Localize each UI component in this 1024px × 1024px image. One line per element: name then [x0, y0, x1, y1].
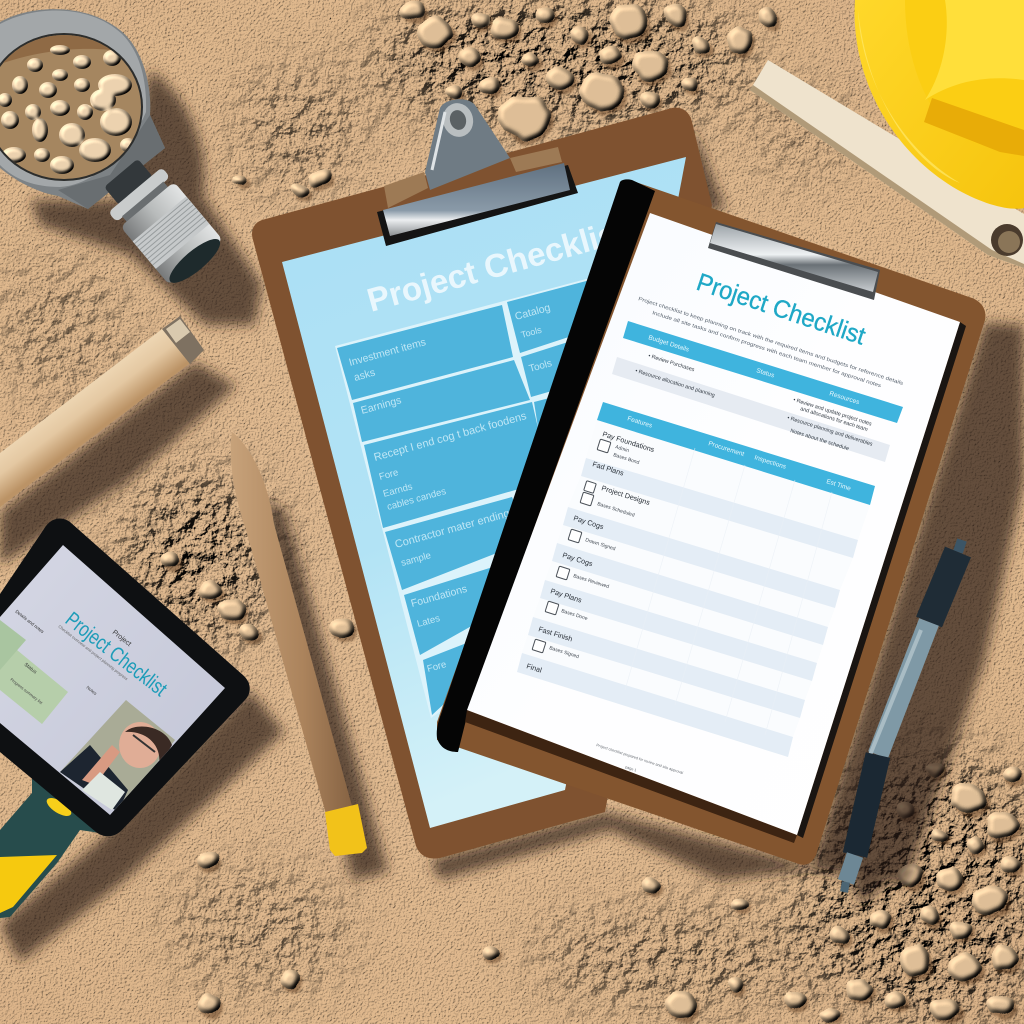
task table: Bases Done — [560, 608, 588, 622]
tablet title: Project Checklist — [61, 608, 171, 701]
tablet screen: Notes — [85, 685, 98, 696]
back checklist paper — [282, 157, 686, 828]
front checklist footer: page 1 — [625, 765, 637, 773]
front checklist intro text: Include all site tasks and confirm progress with each team member for approval notes — [651, 310, 882, 389]
back checklist cell labels: Fore — [426, 659, 448, 675]
summary table: and allocations for each team — [799, 406, 869, 433]
back checklist cell labels: Earnings — [360, 394, 403, 417]
task labels: Project Designs — [600, 483, 651, 507]
task labels: Fast Finish — [537, 624, 574, 643]
icon: tablet with grip — [0, 519, 250, 918]
tablet screen: Status — [23, 662, 38, 676]
task table: Drawn Signed — [584, 537, 616, 552]
back checklist cell labels: Fore — [378, 467, 400, 483]
summary table — [612, 321, 903, 462]
back checklist title: Project Checklist — [363, 212, 631, 319]
back checklist cell labels: Lates — [416, 613, 441, 630]
front checklist title: Project Checklist — [693, 268, 869, 351]
panel: back clipboard — [252, 99, 712, 858]
back checklist cell labels: Investment items — [348, 336, 427, 369]
tablet screen: Progress summary list — [9, 677, 44, 706]
wooden stake — [231, 432, 367, 856]
tablet screen: Checklist overview and project planning progress — [57, 624, 129, 681]
summary table: • Review Purchases — [647, 353, 695, 373]
task checkboxes — [532, 439, 611, 653]
task table: Features — [626, 415, 654, 430]
front checklist paper — [467, 213, 960, 835]
front checklist intro text: Project checklist to keep planning on track with the required items and budgets for reference details — [637, 296, 904, 387]
icon: magnifier — [0, 9, 228, 291]
summary table: Budget Details — [647, 334, 691, 354]
back checklist cell labels: Catalog — [514, 302, 552, 323]
tablet screen — [0, 540, 230, 820]
back clipboard clip — [377, 99, 578, 246]
task table: Bases Scheduled — [596, 501, 636, 519]
task labels: Pay Foundations — [601, 429, 656, 454]
tablet grip handle — [0, 773, 100, 918]
tablet video photo — [60, 700, 175, 812]
task table — [517, 402, 875, 757]
front clipboard clip — [708, 222, 880, 300]
back checklist cell labels: asks — [353, 367, 377, 384]
tablet screen: Project — [111, 629, 132, 648]
hammer handle — [0, 316, 204, 507]
summary table: Status — [755, 367, 776, 380]
front checklist intro text — [637, 296, 904, 389]
tablet screen: Details and notes — [14, 609, 45, 635]
back checklist cell labels: Recept I end cog t back foodens — [373, 410, 528, 464]
task labels: Fad Plans — [591, 459, 625, 478]
icon: yellow hard hat — [855, 0, 1024, 209]
task table: Inspections — [753, 454, 788, 471]
task table: Bases Reviewed — [572, 573, 610, 590]
back checklist cell labels: Contractor mater ending — [394, 508, 511, 551]
task table: Admin — [614, 444, 630, 454]
ruler — [750, 60, 1024, 268]
task table: Bases Signed — [548, 645, 580, 660]
front clipboard black edge — [437, 179, 655, 752]
magnifier lens: magnified pebbles — [0, 35, 141, 179]
task labels: Pay Cogs — [561, 550, 594, 568]
panel: front clipboard — [437, 179, 985, 865]
task labels: Pay Cogs — [572, 513, 605, 531]
task labels: Pay Plans — [549, 586, 583, 605]
back checklist cell labels: sample — [400, 550, 432, 569]
task labels: Final — [525, 661, 543, 675]
icon: magnifier lens barrel — [94, 150, 228, 291]
task table: Bases Bond — [612, 452, 640, 466]
summary table: Resources — [828, 390, 861, 406]
back checklist table — [335, 278, 588, 718]
icon: pen — [844, 540, 962, 892]
summary table: • Resource allocation and planning — [634, 368, 715, 399]
front checklist footer: Project checklist prepared for review and site approval — [596, 743, 684, 775]
back checklist cell labels: cables candes — [386, 486, 448, 513]
summary table: • Review and update project notes — [792, 397, 873, 428]
back checklist cell labels: Tools — [520, 325, 543, 340]
stake: yellow tip — [325, 804, 367, 856]
summary table: • Resource planning and deliverables — [786, 415, 873, 448]
task table: Procurement — [707, 440, 745, 458]
back checklist cell labels: Tools — [528, 358, 553, 375]
summary table: Notes about the schedule — [789, 428, 850, 452]
task table: Est Time — [825, 478, 852, 493]
back checklist cell labels: Foundations — [410, 583, 468, 610]
back checklist cell labels — [348, 302, 553, 675]
task labels — [525, 429, 656, 675]
back checklist cell labels: Earnds — [382, 481, 414, 500]
